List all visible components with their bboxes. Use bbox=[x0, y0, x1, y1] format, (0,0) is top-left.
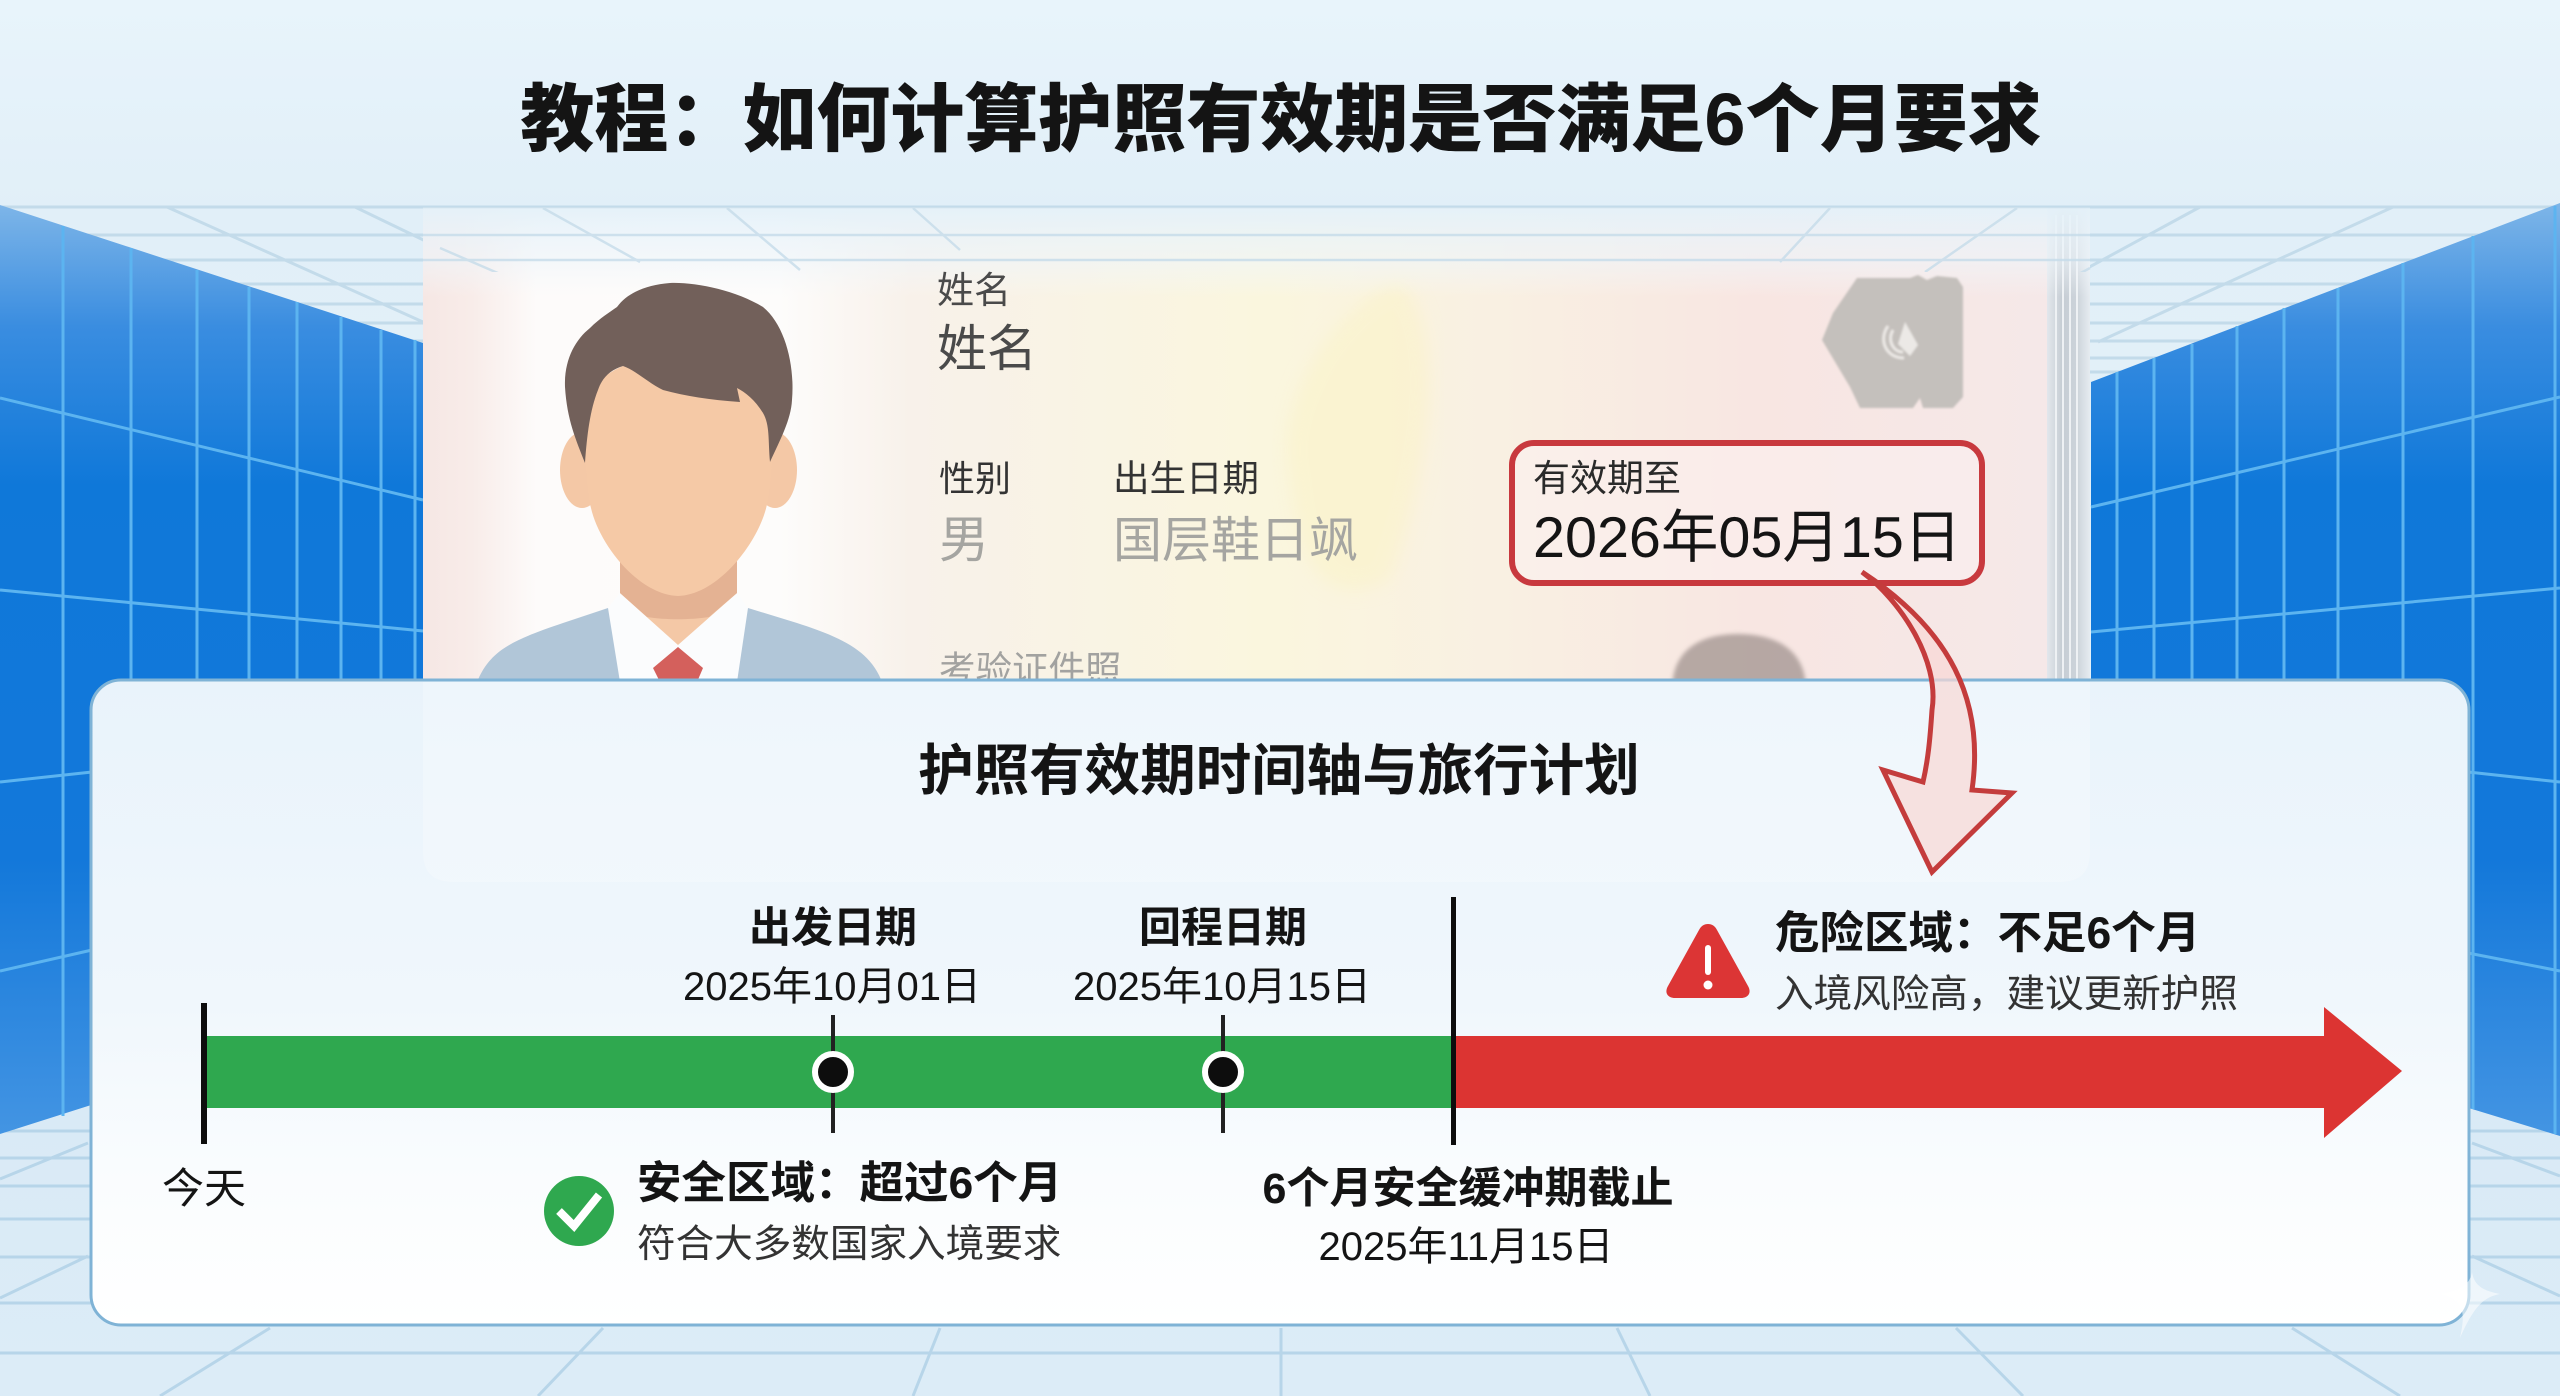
ghost of passport behind panel bbox=[423, 682, 2090, 882]
passport page bbox=[423, 207, 2047, 679]
sparkle mark bbox=[2440, 1272, 2500, 1338]
field: birth date value: 国层鞋日飒 bbox=[1113, 514, 1358, 568]
buffer deadline label: 6个月安全缓冲期截止 bbox=[1263, 1165, 1673, 1213]
green safe bar bbox=[204, 1036, 1453, 1108]
today label: 今天 bbox=[162, 1165, 246, 1212]
valid until label: 有效期至 bbox=[1533, 458, 1681, 499]
ears bbox=[560, 434, 590, 508]
passport card bbox=[355, 207, 2090, 690]
seal stamp bbox=[1822, 275, 1963, 408]
return marker bbox=[1205, 1015, 1241, 1133]
tie bbox=[653, 647, 703, 682]
icon: red warning bbox=[1666, 924, 1750, 998]
ghost portrait bbox=[1670, 632, 1808, 678]
danger zone note: 入境风险高，建议更新护照 bbox=[1775, 973, 2238, 1016]
safe zone note: 符合大多数国家入境要求 bbox=[637, 1223, 1061, 1266]
valid until highlight box bbox=[1512, 443, 1982, 583]
field: name label: 姓名 bbox=[937, 270, 1011, 311]
buffer deadline date: 2025年11月15日 bbox=[1318, 1225, 1614, 1269]
return label: 回程日期 bbox=[1139, 904, 1307, 951]
right blue wall bbox=[2091, 203, 2560, 1136]
face bbox=[585, 355, 772, 596]
field: partially hidden line: 考验证件照 bbox=[939, 649, 1122, 690]
panel heading: 护照有效期时间轴与旅行计划 bbox=[918, 740, 1640, 802]
icon: green check bbox=[544, 1176, 614, 1246]
safe zone heading: 安全区域：超过6个月 bbox=[637, 1159, 1062, 1208]
danger zone heading: 危险区域：不足6个月 bbox=[1775, 909, 2200, 958]
faint ceiling lines over passport top bbox=[423, 207, 2090, 272]
departure label: 出发日期 bbox=[749, 904, 917, 951]
field: sex label: 性别 bbox=[939, 458, 1011, 499]
suit bbox=[477, 608, 882, 682]
departure date: 2025年10月01日 bbox=[683, 965, 981, 1009]
timeline panel bbox=[91, 680, 2469, 1325]
yellow watermark bbox=[1287, 280, 1430, 590]
field: sex value: 男 bbox=[939, 512, 989, 568]
field: name value: 姓名 bbox=[937, 321, 1037, 377]
red danger arrow bbox=[1453, 1007, 2402, 1138]
field: birth date label: 出生日期 bbox=[1113, 458, 1259, 499]
buffer deadline line bbox=[1451, 897, 1456, 1145]
shirt collar bbox=[608, 608, 748, 678]
passport page stack bbox=[2047, 207, 2090, 679]
hair bbox=[565, 283, 793, 463]
floor grid bbox=[0, 1131, 2560, 1396]
valid until date: 2026年05月15日 bbox=[1533, 506, 1961, 570]
left blue wall bbox=[0, 205, 423, 1134]
neck bbox=[620, 593, 737, 645]
title: 教程：如何计算护照有效期是否满足6个月要求 bbox=[520, 78, 2042, 161]
return date: 2025年10月15日 bbox=[1073, 965, 1371, 1009]
departure marker bbox=[815, 1015, 851, 1133]
today tick bbox=[201, 1003, 207, 1144]
curved red arrow from expiry date bbox=[1862, 572, 2012, 872]
portrait bbox=[477, 283, 882, 682]
ceiling grid bbox=[0, 207, 2560, 372]
